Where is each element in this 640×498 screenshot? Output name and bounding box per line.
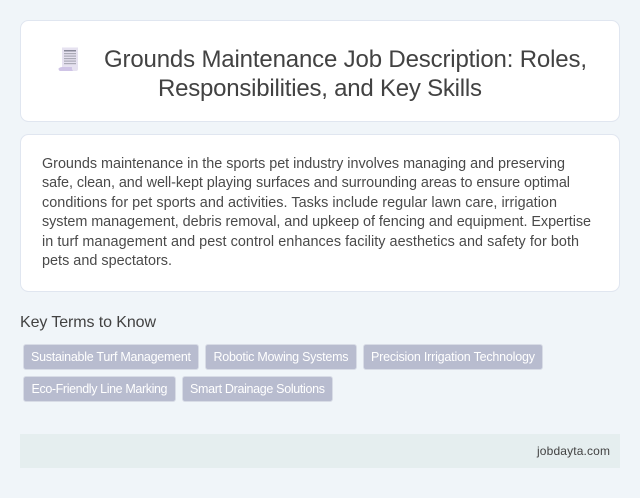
footer bar (20, 434, 620, 468)
chip: precision irrigation technology (364, 344, 542, 370)
chip: smart drainage solutions: Smart Drainage Solutions (190, 382, 325, 396)
footer source text: jobdayta.com (536, 444, 610, 458)
chip: precision irrigation technology: Precision Irrigation Technology (371, 350, 536, 364)
heading: title: Grounds Maintenance Job Description: Roles, (104, 46, 587, 73)
text block: description: safe, clean, and well-kept playing surfaces and surrounding areas to ensure optimal (42, 175, 570, 191)
text block: description: in turf management and pest control enhances facility aesthetics and safety for both (42, 234, 579, 250)
icon: document scroll (58, 48, 78, 71)
chip: robotic mowing systems: Robotic Mowing Systems (214, 350, 348, 364)
chip: eco-friendly line marking: Eco-Friendly Line Marking (32, 382, 168, 396)
panel: description card (20, 134, 620, 292)
chip: robotic mowing systems (206, 344, 356, 370)
chip: eco-friendly line marking (24, 376, 176, 402)
text block: description: conditions for pet sports and activities. Tasks include regular lawn care, irrigation (42, 195, 557, 211)
chip: sustainable turf management: Sustainable Turf Management (31, 350, 192, 364)
chip: sustainable turf management (24, 344, 198, 370)
text block: description: Grounds maintenance in the sports pet industry involves managing and preserving (42, 156, 565, 172)
heading: title: Responsibilities, and Key Skills (158, 75, 482, 102)
heading: key terms: Key Terms to Know (20, 314, 156, 331)
text block: description: pets and spectators. (42, 253, 172, 269)
panel: title card (20, 20, 620, 122)
text block: description (42, 156, 591, 269)
chip: smart drainage solutions (182, 376, 332, 402)
heading: title (104, 46, 587, 102)
text block: description: system management, debris removal, and upkeep of fencing and equipment. Expertise (42, 214, 591, 230)
